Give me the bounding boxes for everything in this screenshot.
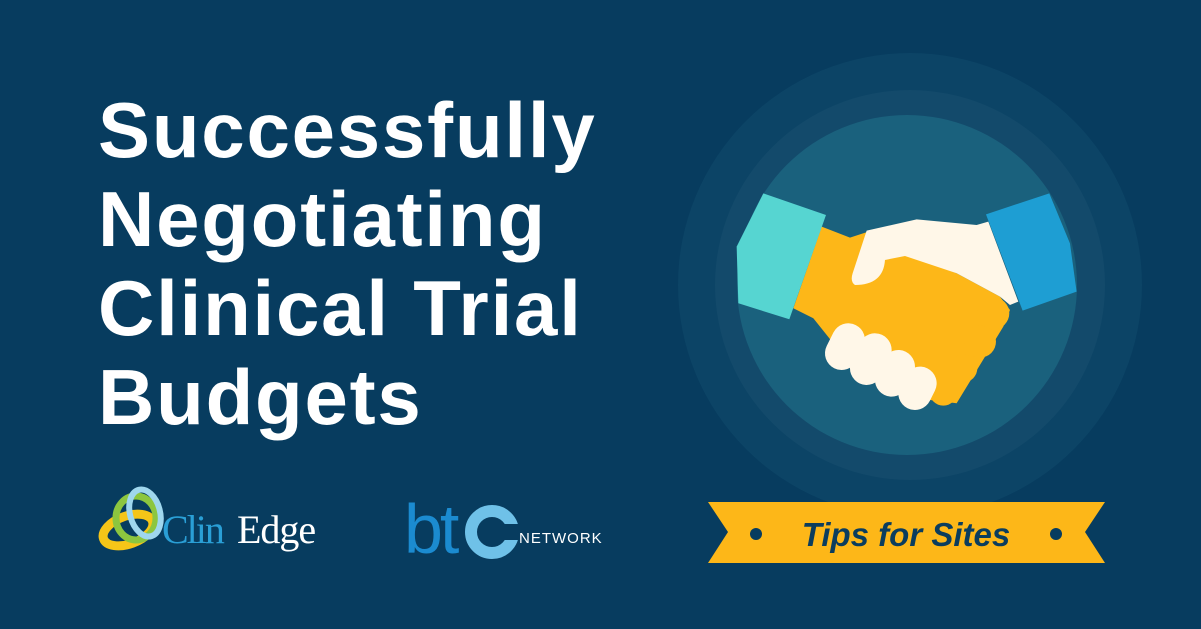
logo: ClinEdge: Edge [237, 507, 315, 552]
banner: tips for sites [708, 502, 1105, 563]
fingers [842, 340, 920, 393]
white hand [852, 219, 1018, 305]
title: Successfully [98, 86, 597, 174]
logo: ClinEdge [99, 486, 315, 552]
title [98, 86, 597, 441]
yellow hand [793, 227, 1010, 406]
cuffs [737, 193, 826, 319]
title: Budgets [98, 353, 423, 441]
logo: btc network: NETWORK [519, 530, 603, 547]
title: Negotiating [98, 175, 547, 263]
logo: ClinEdge: Clin [162, 507, 225, 552]
rings [678, 53, 1142, 517]
icon: handshake [737, 193, 1077, 406]
title: Clinical Trial [98, 264, 583, 352]
banner: tips for sites: Tips for Sites [802, 516, 1010, 553]
logo: btc network: bt [404, 490, 459, 568]
logo: btc network [404, 490, 603, 568]
